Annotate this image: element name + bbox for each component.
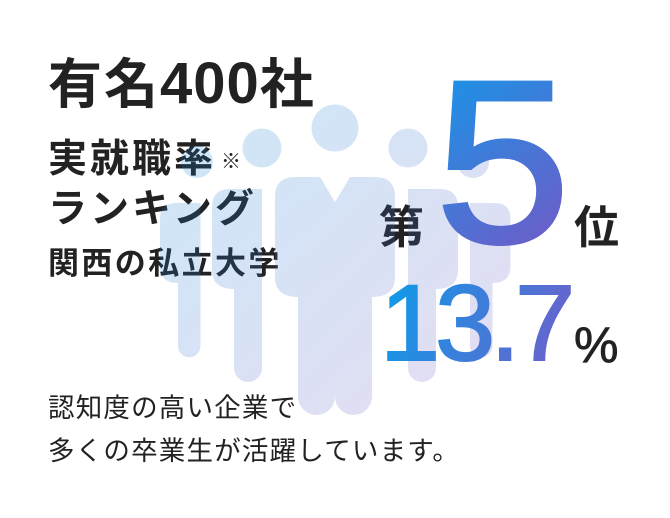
note mark: ※ [221, 151, 241, 173]
subheading: 関西の私立大学: 関西の私立大学 [48, 246, 282, 281]
body text [48, 393, 460, 466]
heading: 実就職率: 実就職率 [48, 138, 216, 181]
big number: 13.7: 13.7 [380, 262, 570, 383]
rank suffix: 位: 位 [574, 202, 619, 253]
body text: 多くの卒業生が活躍しています。 [48, 436, 460, 466]
body text: 認知度の高い企業で [48, 393, 297, 423]
icon: group of people silhouette [160, 104, 510, 415]
unit: percent: % [574, 317, 618, 373]
heading: ランキング: ランキング [48, 188, 257, 231]
big number: 5: 5 [435, 33, 570, 292]
rank prefix: 第: 第 [379, 202, 424, 253]
title: 有名400社: 有名400社 [48, 51, 316, 116]
